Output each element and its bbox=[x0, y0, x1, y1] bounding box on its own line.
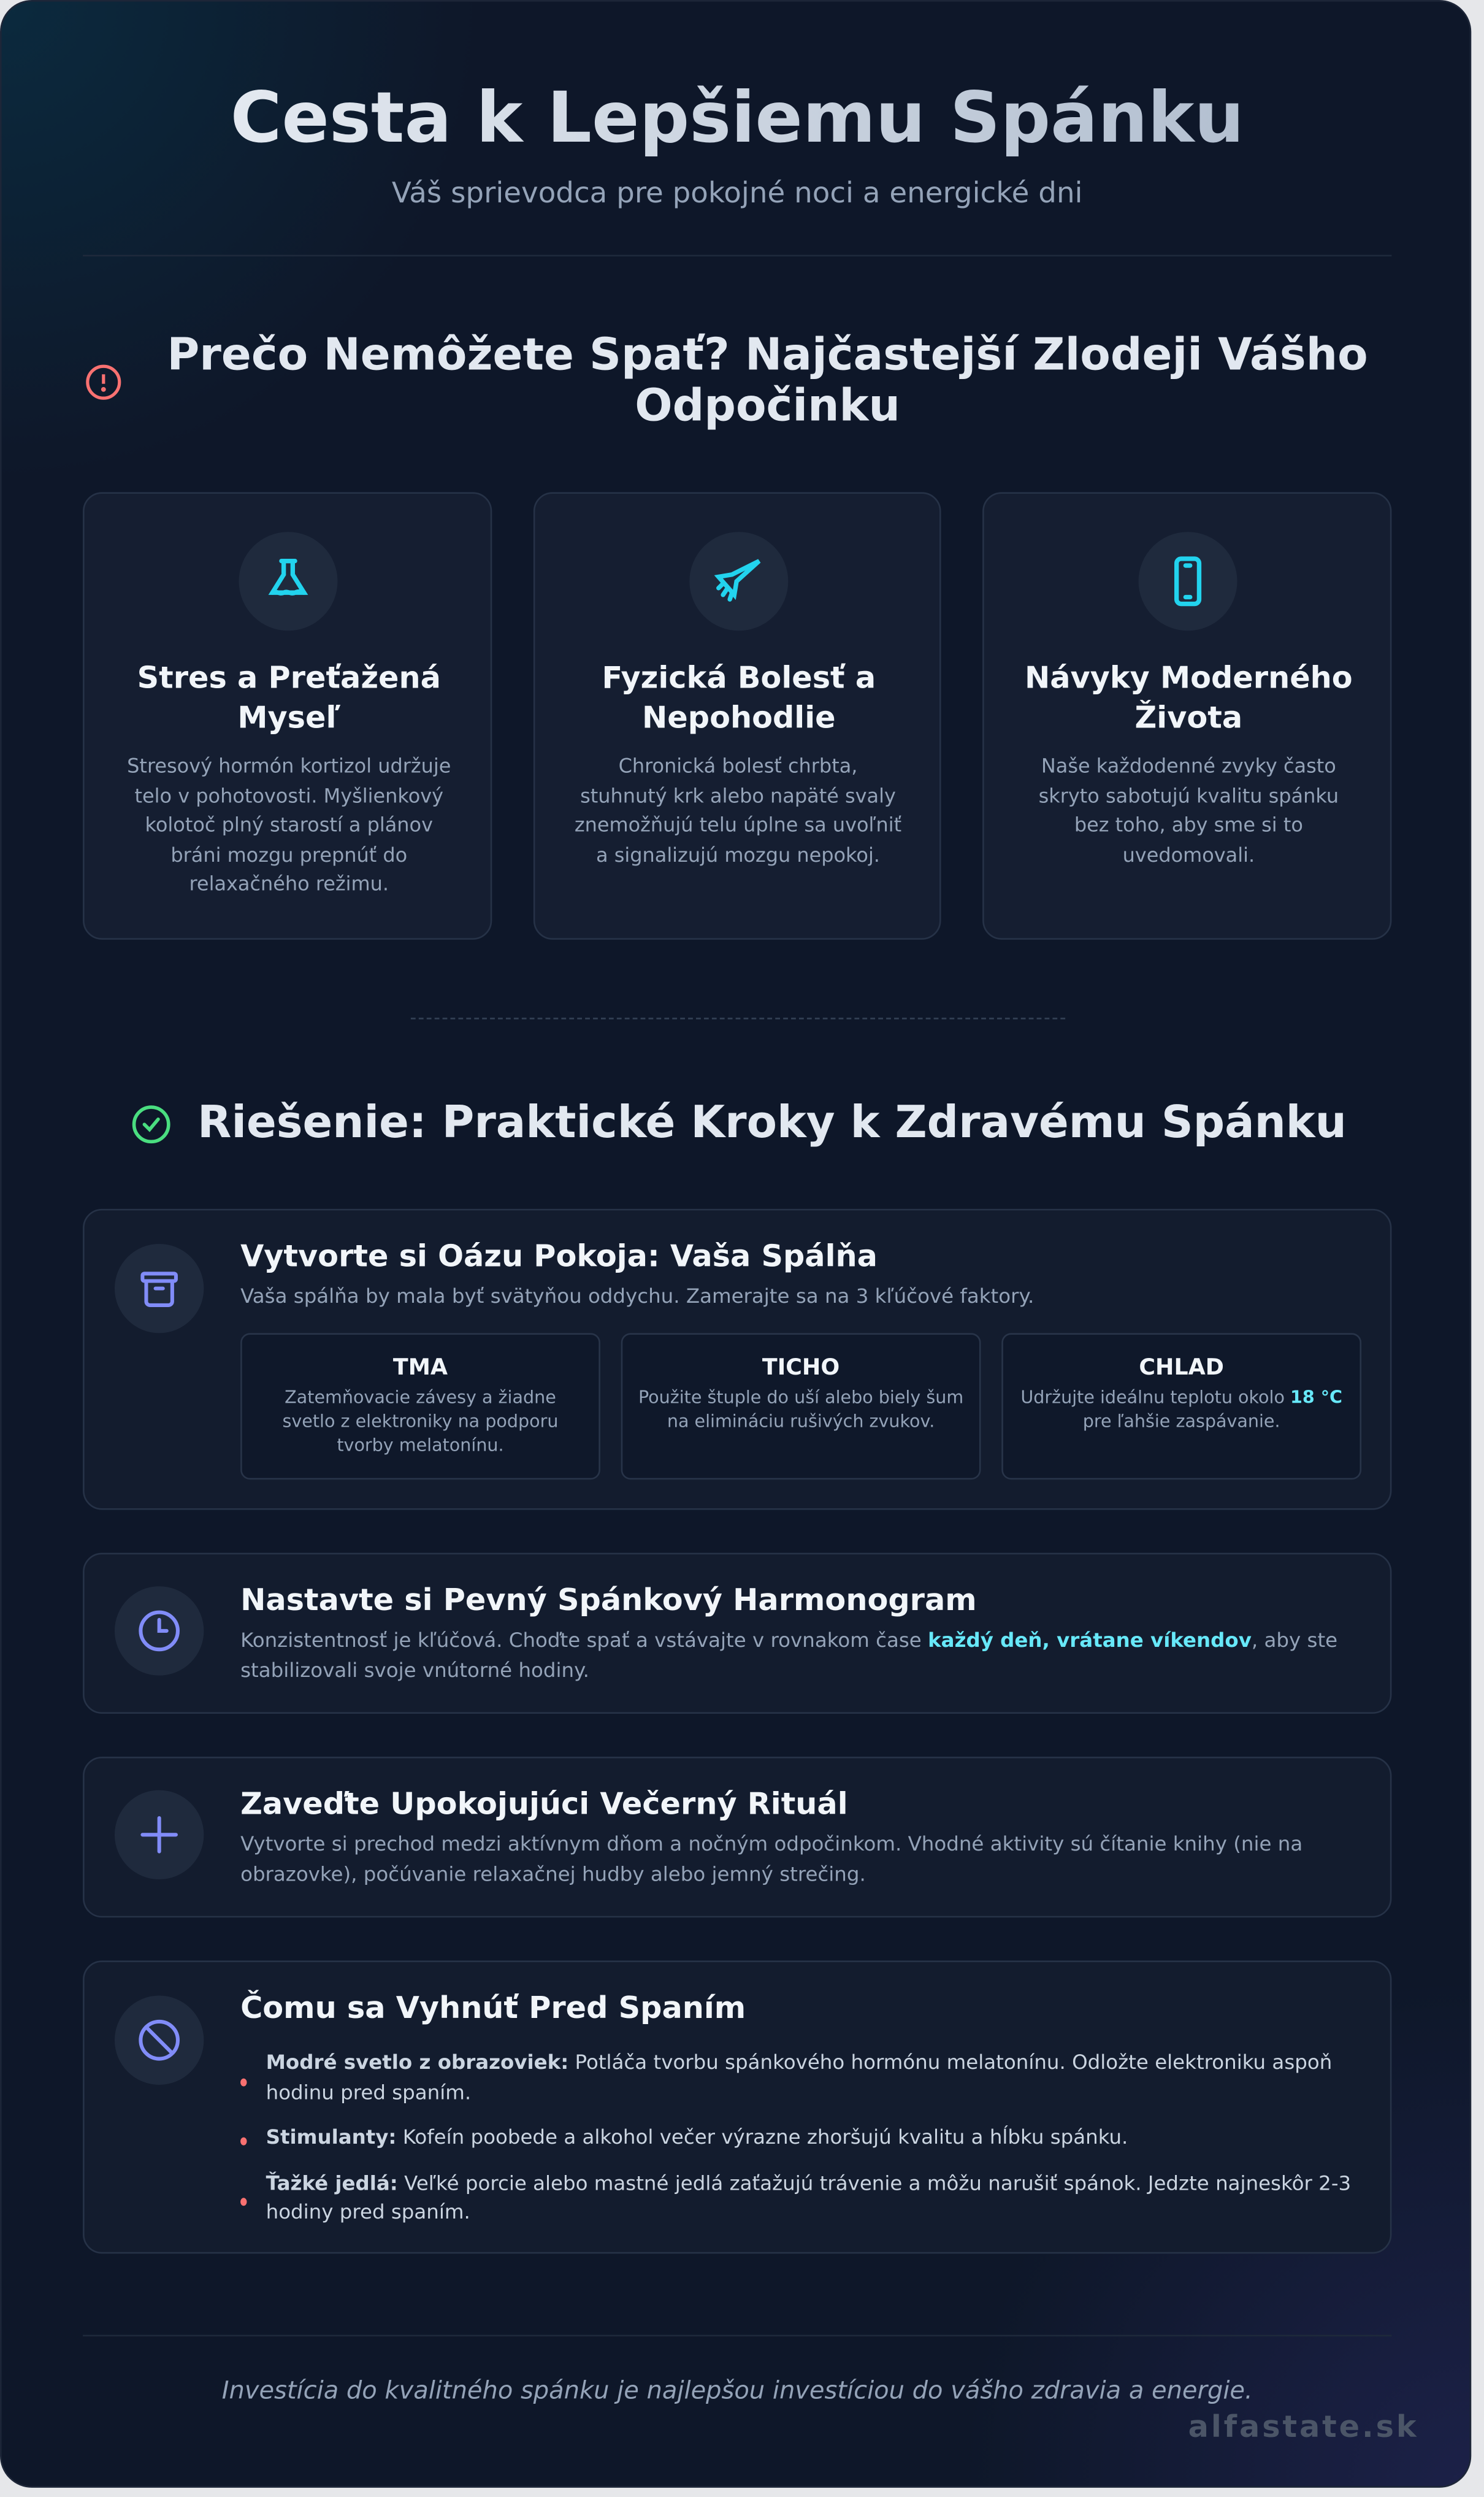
list: Stimulanty: Kofeín poobede a alkohol večer výrazne zhoršujú kvalitu a hĺbku spánku. bbox=[266, 2125, 1128, 2149]
panel: ritual bbox=[83, 1757, 1391, 1917]
panel: schedule: Nastavte si Pevný Spánkový Harmonogram bbox=[240, 1583, 977, 1618]
sub: CHLAD: Udržujte ideálnu teplotu okolo 18 °C pre ľahšie zaspávanie. bbox=[1020, 1387, 1342, 1432]
icon: flask bbox=[239, 532, 337, 631]
heading: causes: Prečo Nemôžete Spať? Najčastejší Zlodeji Vášho Odpočinku bbox=[167, 328, 1368, 432]
sub: TICHO: Použite štuple do uší alebo biely šum na elimináciu rušivých zvukov. bbox=[638, 1387, 963, 1432]
subtitle: Váš sprievodca pre pokojné noci a energické dni bbox=[392, 177, 1083, 210]
heading: solutions: Riešenie: Praktické Kroky k Zdravému Spánku bbox=[197, 1095, 1347, 1148]
icon: box bbox=[115, 1244, 204, 1333]
sub: TICHO: TICHO bbox=[762, 1356, 840, 1381]
title bbox=[2, 73, 1473, 166]
list bbox=[240, 2050, 1351, 2223]
panel: pain: Chronická bolesť chrbta, stuhnutý krk alebo napäté svaly znemožňujú telu úplne sa uvoľniť a signalizujú mozgu nepokoj. bbox=[575, 755, 901, 865]
sub: CHLAD bbox=[1001, 1333, 1361, 1479]
icon: phone bbox=[1139, 532, 1237, 631]
panel: pain bbox=[534, 492, 941, 940]
panel: schedule: Konzistentnosť je kľúčová. Choďte spať a vstávajte v rovnakom čase každý deň, vrátane víkendov, aby ste stabilizovali svoje vnútorné hodiny. bbox=[240, 1628, 1337, 1681]
sub: TICHO bbox=[621, 1333, 981, 1479]
panel: avoid: Čomu sa Vyhnúť Pred Spaním bbox=[240, 1991, 746, 2026]
footer quote: Investícia do kvalitného spánku je najlepšou investíciou do vášho zdravia a energie. bbox=[222, 2376, 1253, 2405]
panel: bedroom: Vytvorte si Oázu Pokoja: Vaša Spálňa bbox=[240, 1239, 878, 1274]
panel: ritual: Vytvorte si prechod medzi aktívnym dňom a nočným odpočinkom. Vhodné aktivity sú čítanie knihy (nie na obrazovke), počúvanie relaxačnej hudby alebo jemný strečing. bbox=[240, 1832, 1302, 1885]
sub: TMA: TMA bbox=[393, 1356, 448, 1381]
panel: stress: Stresový hormón kortizol udržuje telo v pohotovosti. Myšlienkový kolotoč plný starostí a plánov bráni mozgu prepnúť do relaxačného režimu. bbox=[127, 755, 451, 895]
panel: stress: Stres a Preťažená Myseľ bbox=[137, 661, 441, 736]
icon: plus bbox=[115, 1790, 204, 1879]
icon: alert bbox=[86, 364, 121, 400]
panel: habits bbox=[982, 492, 1391, 940]
panel: habits: Návyky Moderného Života bbox=[1025, 661, 1353, 736]
brand: alfastate.sk bbox=[1188, 2410, 1419, 2445]
icon: clock bbox=[115, 1586, 204, 1676]
icon: ban bbox=[115, 1996, 204, 2085]
panel: bedroom: Vaša spálňa by mala byť svätyňou oddychu. Zamerajte sa na 3 kľúčové faktory. bbox=[240, 1284, 1034, 1308]
panel: avoid bbox=[83, 1960, 1391, 2253]
list: Ťažké jedlá: Veľké porcie alebo mastné jedlá zaťažujú trávenie a môžu narušiť spánok. Jedzte najneskôr 2-3 hodiny pred spaním. bbox=[266, 2170, 1351, 2223]
panel: pain: Fyzická Bolesť a Nepohodlie bbox=[602, 661, 876, 736]
title: Cesta k Lepšiemu Spánku bbox=[231, 78, 1244, 159]
icon: check bbox=[132, 1105, 170, 1143]
panel: schedule bbox=[83, 1553, 1391, 1714]
panel: stress bbox=[83, 492, 492, 940]
list: Modré svetlo z obrazoviek: Potláča tvorbu spánkového hormónu melatonínu. Odložte elektroniku aspoň hodinu pred spaním. bbox=[266, 2050, 1332, 2103]
sub: CHLAD: CHLAD bbox=[1139, 1356, 1224, 1381]
panel: habits: Naše každodenné zvyky často skryto sabotujú kvalitu spánku bez toho, aby sme si to uvedomovali. bbox=[1039, 755, 1339, 865]
panel: bedroom bbox=[83, 1209, 1391, 1510]
panel: ritual: Zaveďte Upokojujúci Večerný Rituál bbox=[240, 1787, 848, 1822]
icon: brush bbox=[689, 532, 788, 631]
sub: TMA bbox=[240, 1333, 600, 1479]
sub: TMA: Zatemňovacie závesy a žiadne svetlo z elektroniky na podporu tvorby melatonínu. bbox=[282, 1387, 558, 1456]
